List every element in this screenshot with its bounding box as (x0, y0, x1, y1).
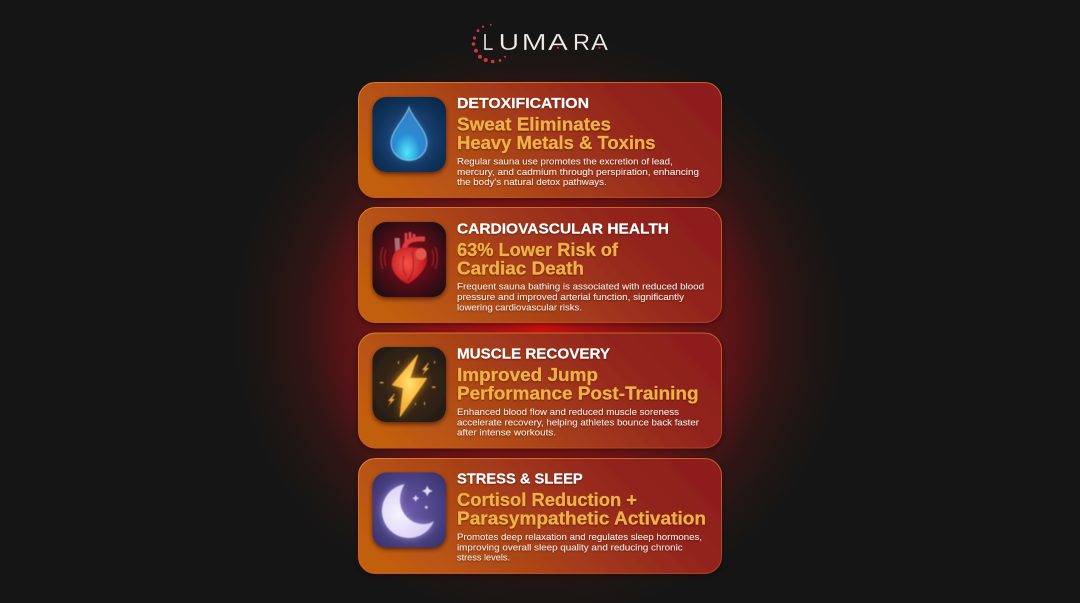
logo wordmark: A (548, 29, 568, 55)
heading: STRESS & SLEEP (457, 471, 583, 487)
logo wordmark: R (573, 29, 590, 55)
heading: MUSCLE RECOVERY (457, 346, 610, 362)
logo: Lumara (472, 24, 608, 63)
body text: the body's natural detox pathways. (457, 177, 607, 188)
stat title (457, 364, 698, 404)
stat title: Improved Jump (457, 364, 598, 385)
stat title (457, 114, 656, 153)
icon: water drop (372, 97, 446, 172)
logo wordmark: U (499, 29, 519, 55)
body text (457, 157, 699, 188)
body text (457, 532, 702, 564)
body text: pressure and improved arterial function, significantly (457, 292, 684, 303)
body text: stress levels. (457, 552, 510, 564)
stat title: Cardiac Death (457, 257, 584, 278)
stat title: Performance Post-Training (457, 383, 698, 404)
body text: improving overall sleep quality and reducing chronic (457, 542, 683, 553)
stat title: 63% Lower Risk of (457, 239, 619, 260)
body text: lowering cardiovascular risks. (457, 302, 582, 313)
logo wordmark: M (522, 29, 546, 55)
icon: heart (372, 222, 446, 297)
body text: after intense workouts. (457, 428, 556, 438)
stat title (457, 239, 619, 278)
body text (457, 282, 704, 313)
body text: Regular sauna use promotes the excretion of lead, (457, 157, 673, 168)
stat title: Heavy Metals & Toxins (457, 132, 656, 153)
stat title (457, 489, 706, 529)
body text: accelerate recovery, helping athletes bounce back faster (457, 417, 700, 428)
heading: DETOXIFICATION (457, 96, 589, 112)
stat title: Sweat Eliminates (457, 114, 611, 135)
body text: Frequent sauna bathing is associated with reduced blood (457, 282, 704, 293)
logo wordmark: L (482, 29, 493, 55)
heading: CARDIOVASCULAR HEALTH (457, 221, 669, 237)
icon: lightning bolt (372, 347, 446, 422)
panel: muscle recovery (358, 333, 722, 448)
logo wordmark (482, 29, 608, 55)
stat title: Cortisol Reduction + (457, 489, 637, 510)
body text: Promotes deep relaxation and regulates sleep hormones, (457, 532, 702, 543)
stat title: Parasympathetic Activation (457, 508, 706, 529)
panel: detoxification (358, 82, 722, 198)
body text: mercury, and cadmium through perspiration, enhancing (457, 167, 699, 178)
panel: cardiovascular health (358, 208, 722, 322)
icon: crescent moon (372, 472, 446, 548)
logo dotted ring (472, 24, 506, 63)
logo wordmark: A (591, 29, 608, 55)
body text (457, 407, 700, 438)
panel: stress and sleep (358, 458, 722, 574)
body text: Enhanced blood flow and reduced muscle soreness (457, 407, 679, 418)
